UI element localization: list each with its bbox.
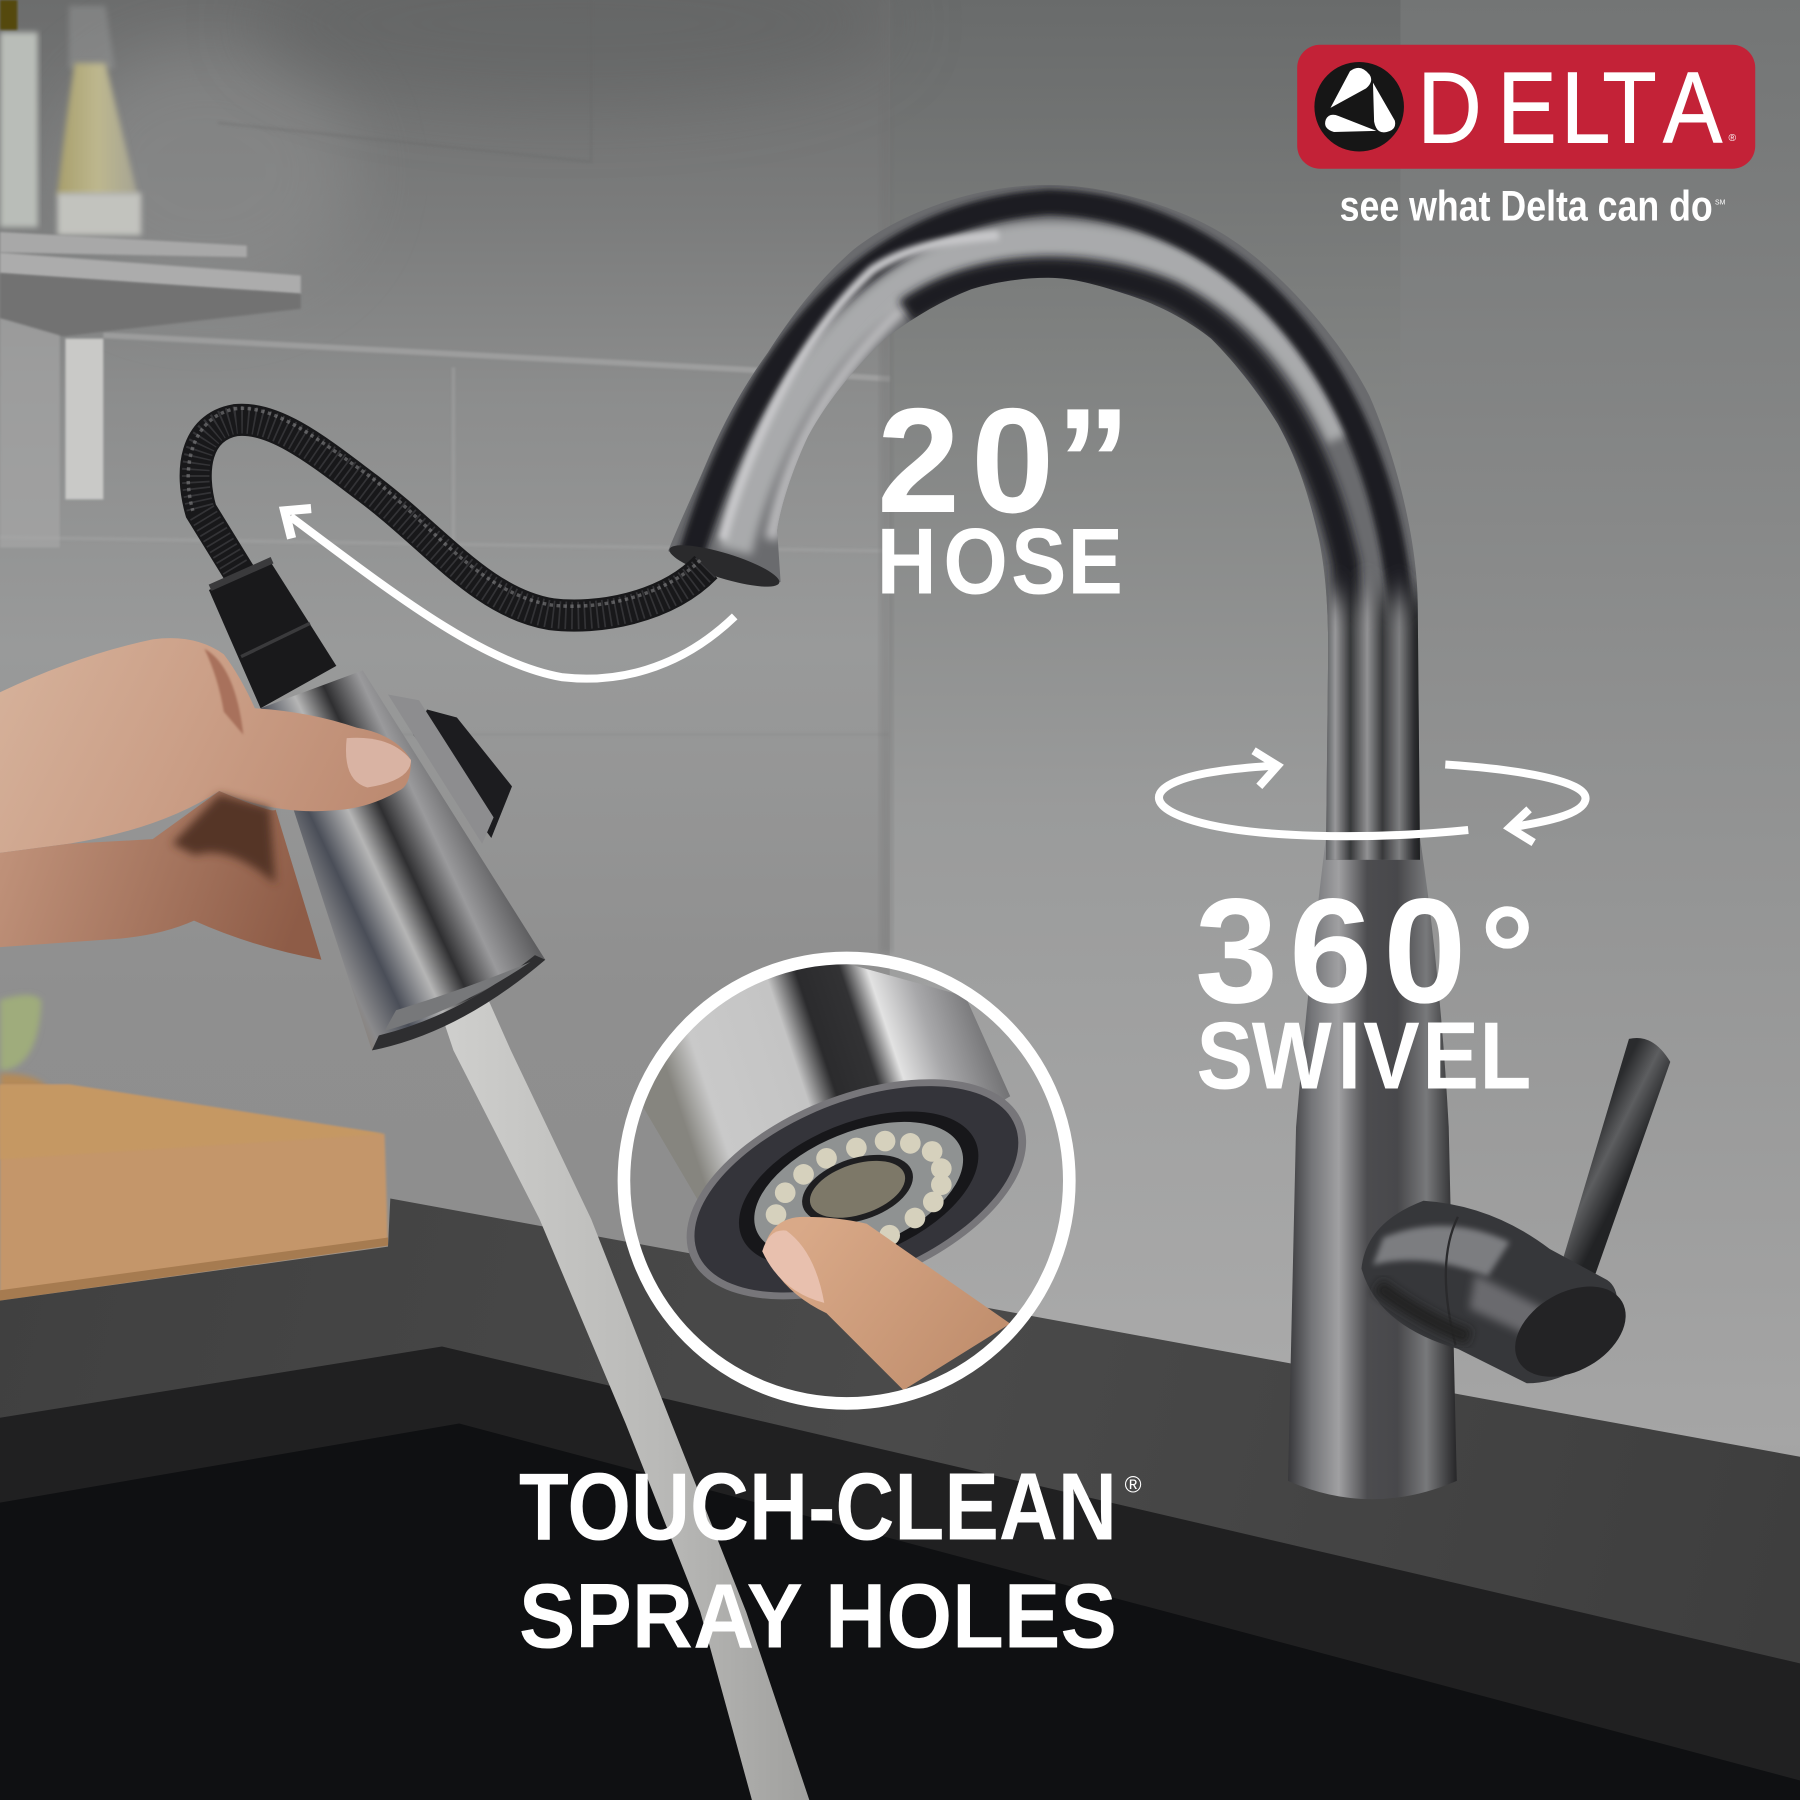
braided hose — [188, 408, 706, 616]
heading: 360 swivel: ° — [1480, 878, 1535, 1032]
faucet base — [1288, 838, 1457, 1499]
heading: touch-clean spray holes: TOUCH-CLEAN — [519, 1454, 1117, 1560]
hand upper with thumb — [0, 638, 411, 853]
sink rim and basin — [0, 1347, 1800, 1800]
icon: Delta triangle mark — [1314, 62, 1404, 152]
spray paddle — [413, 709, 512, 838]
hose length arrow — [285, 509, 735, 679]
heading: 20 inch hose: 20 — [877, 377, 1054, 544]
spray face holes — [385, 962, 530, 1031]
finger segment — [204, 649, 243, 735]
fingertip — [763, 1217, 1010, 1390]
spray holes — [766, 1131, 952, 1246]
heading: 20 inch hose: ” — [1056, 377, 1131, 544]
hose connector — [209, 560, 336, 708]
spout mouth — [666, 537, 783, 595]
counter top — [0, 1198, 1800, 1800]
heading: touch-clean spray holes: SPRAY HOLES — [519, 1565, 1117, 1667]
faucet spout — [668, 185, 1420, 860]
spray face — [372, 955, 545, 1050]
spray head with hand — [0, 560, 545, 1050]
heading: 20 inch hose: HOSE — [877, 509, 1123, 614]
heading: 20 inch hose — [877, 377, 1131, 614]
center mesh — [802, 1154, 913, 1222]
finger nail — [762, 1230, 824, 1303]
magnified circle: touch-clean nozzle — [597, 936, 1069, 1403]
circle outline — [624, 958, 1069, 1403]
paddle housing — [388, 695, 494, 844]
spray wand body — [261, 670, 545, 1050]
Delta logo — [1297, 45, 1755, 169]
heading: 360 swivel: 360 — [1195, 867, 1466, 1034]
heading: touch-clean spray holes: ® — [1125, 1471, 1142, 1497]
heading: touch-clean spray holes — [519, 1454, 1142, 1667]
tagline: see what Delta can do — [1340, 182, 1713, 229]
swivel arrows — [1159, 751, 1586, 843]
heading: 360 swivel — [1195, 867, 1535, 1109]
Delta logo: DELTA — [1418, 52, 1723, 165]
cutting board and fruit — [0, 995, 388, 1301]
Delta logo: ® — [1728, 133, 1736, 144]
water stream — [442, 999, 809, 1800]
tagline: SM — [1715, 199, 1726, 206]
finger shadow — [172, 794, 276, 884]
heading: 360 swivel: SWIVEL — [1197, 1003, 1531, 1109]
hand lower palm — [0, 791, 321, 960]
shelf with bottles — [0, 0, 301, 499]
nozzle cylinder — [644, 964, 1010, 1199]
nozzle face ring — [686, 1079, 1026, 1300]
thumb nail — [346, 738, 411, 788]
faucet handle — [1361, 1038, 1670, 1395]
